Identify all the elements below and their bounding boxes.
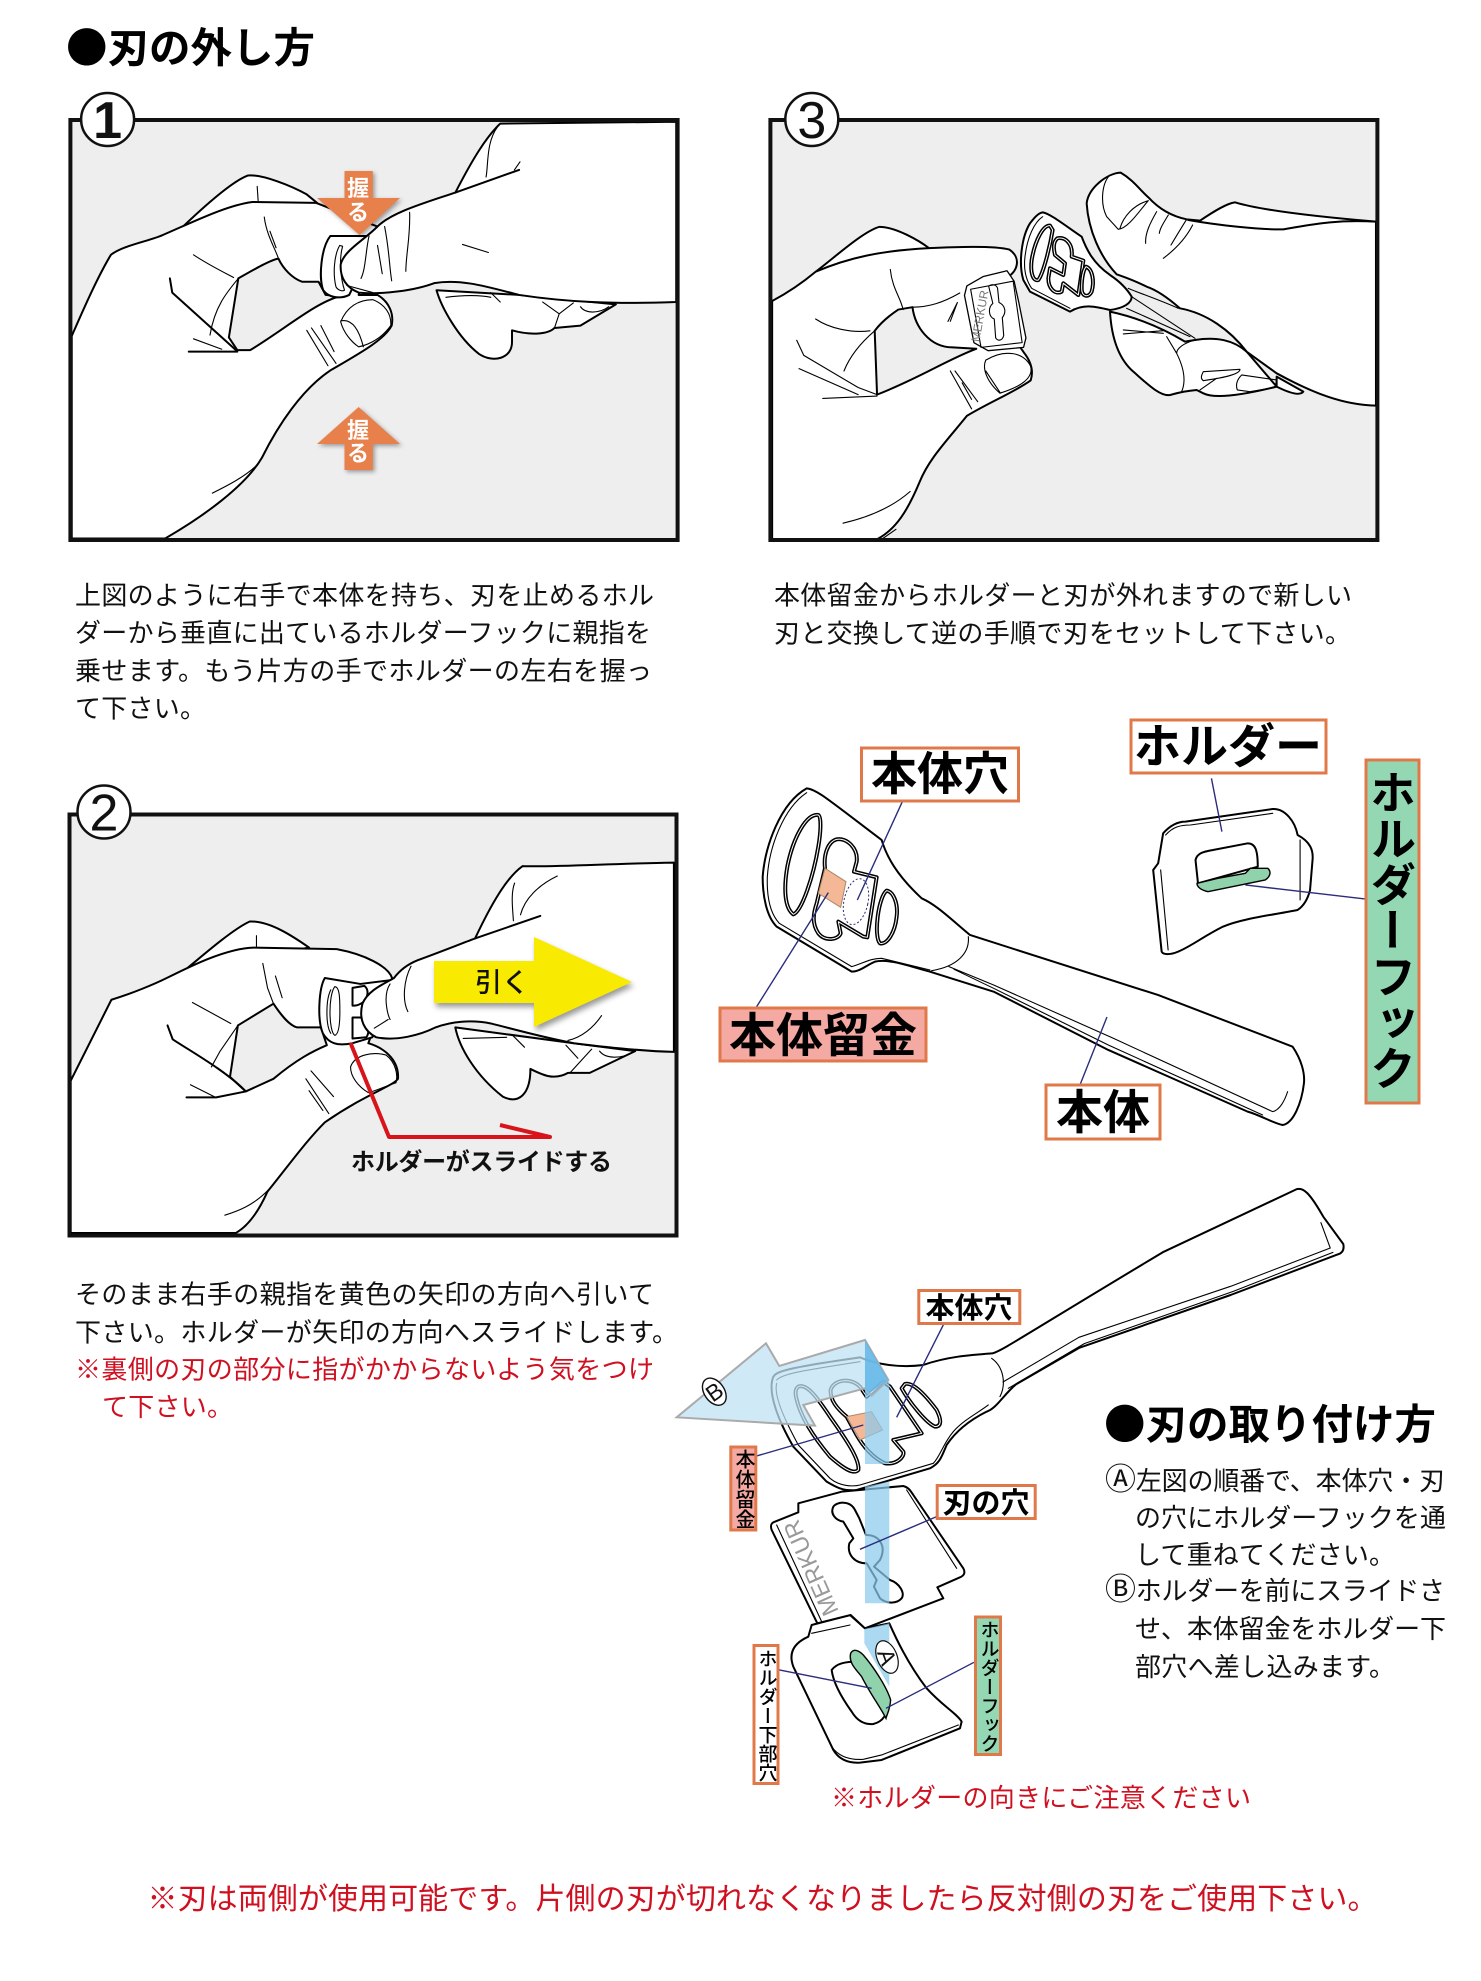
MERKUR mark on blade: MERKUR: [778, 1516, 844, 1620]
red arrow: holder slide direction: [350, 1043, 550, 1137]
text: step 2 instructions: そのまま右手の親指を黄色の矢印の方向へ引いて: [75, 1280, 654, 1310]
illustration: right hand holding the razor body: [1021, 173, 1376, 406]
note: both blade edges usable: ※刃は両側が使用可能です。片側の刃が切れなくなりましたら反対側の刃をご使用下さい。: [148, 1883, 1378, 1916]
blue slide arrow: [677, 1325, 943, 1687]
text: step 1 instructions: [75, 580, 654, 724]
text: step 1 instructions: て下さい。: [75, 694, 206, 724]
heading: how to attach the blade: ●刃の取り付け方: [1104, 1391, 1436, 1451]
text: step 2 instructions: [75, 1280, 678, 1422]
yellow arrow: pull: 引く: [475, 968, 529, 998]
label: holder slides: ホルダーがスライドする: [351, 1148, 612, 1176]
text: attachment instructions: せ、本体留金をホルダー下: [1135, 1614, 1446, 1644]
text: attachment instructions: Ⓑホルダーを前にスライドさ: [1105, 1564, 1445, 1609]
arrow: grip from below: [317, 407, 400, 470]
retaining clip highlight: [847, 1412, 883, 1440]
step number 3: [785, 92, 838, 150]
illustration: hands sliding holder: [71, 863, 674, 1233]
marker A: [871, 1637, 903, 1677]
text: attachment instructions: [1105, 1454, 1446, 1682]
arrow: grip from above: 握: [347, 176, 369, 201]
blade and holder: [771, 1486, 964, 1763]
label: holder lower hole (vertical): ホルダー下部穴: [756, 1649, 777, 1782]
text: attachment instructions: して重ねてください。: [1135, 1540, 1395, 1570]
label: holder hook: ホルダーフック: [1364, 769, 1416, 1091]
label: holder: ホルダー: [1134, 720, 1322, 773]
assembled razor body: [772, 1189, 1344, 1490]
arrow: grip from above: [317, 171, 400, 235]
text: step 3 instructions: [774, 580, 1352, 648]
step number 3: 3: [797, 92, 826, 150]
marker B: [698, 1374, 731, 1410]
text: step 1 instructions: 乗せます。もう片方の手でホルダーの左右を握っ: [75, 656, 652, 686]
panel 3: blade removed: [770, 92, 1377, 540]
MERKUR mark on blade: MERKUR: [969, 289, 991, 343]
text: attachment instructions: の穴にホルダーフックを通: [1135, 1503, 1446, 1533]
marker B: B: [701, 1377, 728, 1407]
text: step 1 instructions: ダーから垂直に出ているホルダーフックに親指を: [75, 618, 651, 648]
blue guide band: [864, 1380, 889, 1687]
panel 1: grip the holder: [70, 92, 678, 540]
label: holder hook (vertical): ホルダーフック: [978, 1620, 998, 1753]
diagram: assembly of razor, blade and holder: [677, 1189, 1344, 1784]
panel 2 frame: [70, 814, 676, 1236]
diagram: parts of razor body: [720, 720, 1419, 1139]
arrow: grip from above: る: [347, 200, 369, 225]
panel 2: slide the holder: [70, 784, 676, 1236]
label: body hole: 本体穴: [925, 1292, 1013, 1325]
leader lines on holder: [779, 1662, 974, 1708]
text: step 3 instructions: 刃と交換して逆の手順で刃をセットして下さい。: [774, 618, 1351, 648]
text: step 2 instructions: 下さい。ホルダーが矢印の方向へスライドします。: [75, 1318, 678, 1348]
illustration: left hand holding the blade: [772, 227, 1032, 539]
holder part: [1153, 778, 1365, 954]
label: body retaining clip: 本体留金: [729, 1009, 917, 1062]
illustration: hands gripping holder: [72, 122, 676, 538]
holder: [791, 1615, 962, 1763]
text: step 1 instructions: 上図のように右手で本体を持ち、刃を止めるホル: [75, 580, 654, 610]
label: blade hole: 刃の穴: [942, 1487, 1030, 1520]
step number 2: 2: [90, 784, 118, 842]
marker A: A: [872, 1645, 902, 1669]
arrow: grip from below: る: [347, 441, 369, 466]
label: body hole: 本体穴: [871, 748, 1009, 800]
panel 3 frame: [770, 120, 1377, 540]
razor body: [757, 788, 1304, 1125]
step number 1: [81, 92, 134, 150]
label: body retaining clip (vertical): 本体留金: [732, 1449, 755, 1529]
panel 1 frame: [70, 120, 678, 540]
note: mind the holder orientation: ※ホルダーの向きにご注意ください: [831, 1783, 1251, 1813]
blade: [771, 1486, 964, 1628]
title: how to remove the blade: ●刃の外し方: [66, 14, 315, 74]
text: attachment instructions: Ⓐ左図の順番で、本体穴・刃: [1105, 1454, 1445, 1499]
text: attachment instructions: 部穴へ差し込みます。: [1135, 1652, 1395, 1682]
step number 2: [78, 784, 130, 842]
arrow: grip from below: 握: [347, 418, 369, 443]
step number 1: 1: [93, 92, 122, 150]
text: step 2 instructions: ※裏側の刃の部分に指がかからないよう気をつけ: [75, 1354, 654, 1384]
label: body: 本体: [1056, 1086, 1150, 1139]
text: step 3 instructions: 本体留金からホルダーと刃が外れますので新しい: [774, 580, 1352, 610]
yellow arrow: pull: [434, 937, 632, 1027]
text: step 2 instructions: て下さい。: [102, 1392, 233, 1422]
retaining clip highlight: [818, 868, 846, 907]
